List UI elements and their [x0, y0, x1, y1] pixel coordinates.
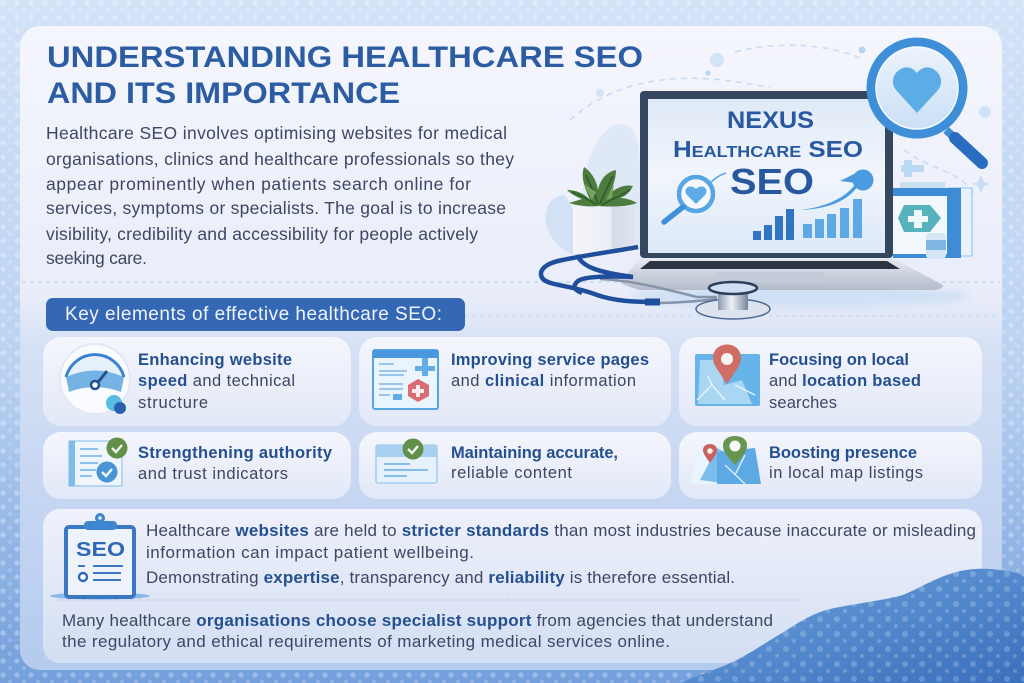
- hero background decoration: [22, 45, 1000, 316]
- screen title: NEXUS: [727, 107, 814, 134]
- title: [47, 41, 643, 110]
- card text: Strengthening authority: [138, 444, 333, 462]
- title: AND ITS IMPORTANCE: [47, 77, 400, 110]
- note text 1: Healthcare websites are held to stricter standards than most industries because inaccurate or misleading: [146, 521, 976, 540]
- card text: Boosting presence: [769, 444, 917, 462]
- icon: web page with plus: [373, 350, 438, 409]
- intro paragraph: visibility, credibility and accessibility for people actively: [46, 224, 478, 244]
- illustration: plant: [567, 167, 637, 254]
- intro paragraph: [46, 123, 514, 268]
- card text: and trust indicators: [138, 465, 288, 483]
- card: local searches: [679, 337, 982, 426]
- pill: key elements heading: [46, 298, 465, 331]
- card text: Enhancing website: [138, 351, 292, 369]
- card text: structure: [138, 394, 208, 412]
- panel: bottom notes: [43, 509, 982, 663]
- card text: reliable content: [451, 464, 572, 482]
- illustration: laptop: [620, 91, 943, 290]
- illustration: stethoscope: [541, 247, 770, 319]
- screen title: [673, 107, 863, 202]
- card text: Improving service pages: [451, 351, 649, 369]
- note text 2: Many healthcare organisations choose specialist support from agencies that understand: [62, 611, 773, 630]
- screen bar chart: [753, 170, 874, 240]
- note text 1: information can impact patient wellbeing.: [146, 543, 474, 562]
- card: service pages: [359, 337, 671, 426]
- card text: [138, 444, 333, 483]
- card text: searches: [769, 394, 837, 412]
- icon: speed gauge: [60, 344, 130, 414]
- icon: map with red pin: [695, 344, 760, 406]
- decorative wave: [680, 569, 1024, 683]
- illustration: medical folders: [893, 160, 990, 259]
- intro paragraph: seeking care.: [46, 248, 147, 268]
- card text: Focusing on local: [769, 351, 909, 369]
- pill: key elements heading: Key elements of effective healthcare SEO:: [65, 304, 442, 325]
- intro paragraph: organisations, clinics and healthcare professionals so they: [46, 149, 514, 169]
- card: map listings: [679, 432, 982, 499]
- intro paragraph: services, symptoms or specialists. The goal is to increase: [46, 198, 506, 218]
- icon: SEO clipboard: SEO: [76, 539, 125, 561]
- screen magnifier icon: [664, 173, 726, 222]
- title: UNDERSTANDING HEALTHCARE SEO: [47, 41, 643, 74]
- note text 1: [146, 521, 976, 587]
- card text: [769, 444, 923, 482]
- screen title: Healthcare SEO: [673, 136, 863, 162]
- icon: document with checks: [69, 438, 128, 486]
- card text: Maintaining accurate,: [451, 444, 618, 462]
- card text: [451, 444, 618, 482]
- card text: speed and technical: [138, 372, 295, 390]
- card: accurate content: [359, 432, 671, 499]
- intro paragraph: appear prominently when patients search online for: [46, 174, 471, 194]
- card text: [138, 351, 295, 412]
- icon: SEO clipboard: [50, 513, 150, 600]
- card text: [451, 351, 649, 390]
- icon: browser with check: [376, 438, 437, 483]
- note text 2: the regulatory and ethical requirements of marketing medical services online.: [62, 632, 670, 651]
- card: authority: [43, 432, 351, 499]
- note text 1: Demonstrating expertise, transparency and reliability is therefore essential.: [146, 568, 735, 587]
- icon: folded map with pins: [690, 436, 761, 484]
- card text: and clinical information: [451, 372, 636, 390]
- card text: in local map listings: [769, 464, 923, 482]
- intro paragraph: Healthcare SEO involves optimising websites for medical: [46, 123, 507, 143]
- note text 2: [62, 611, 773, 651]
- card text: [769, 351, 921, 412]
- screen title: SEO: [730, 161, 814, 202]
- card: website speed: [43, 337, 351, 426]
- illustration: magnifier with heart: [871, 42, 982, 163]
- card text: and location based: [769, 372, 921, 390]
